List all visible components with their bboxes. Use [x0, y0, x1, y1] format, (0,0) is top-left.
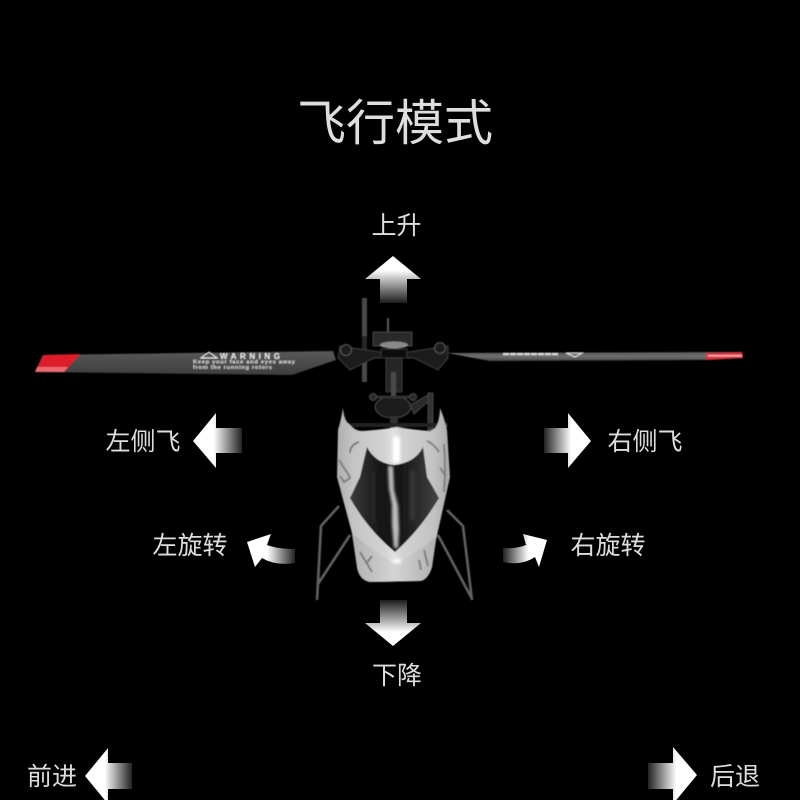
arrow: up [365, 256, 421, 303]
antenna [387, 318, 389, 334]
swashplate [375, 396, 411, 418]
canopy [337, 408, 450, 582]
hub arms [338, 346, 448, 370]
canopy decals [339, 441, 446, 572]
right rotor blade [447, 352, 743, 361]
left rotor blade [35, 351, 336, 375]
helicopter [35, 298, 743, 600]
warning text: from the running rotors [193, 365, 272, 371]
arrow: fly left [193, 413, 242, 468]
label: rotate right: 右旋转 [570, 532, 646, 560]
warning text: Keep your face and eyes away [193, 360, 296, 366]
nose lower shell [352, 533, 436, 582]
label: rotate left: 左旋转 [152, 532, 228, 560]
arrow: fly right [544, 413, 591, 468]
nose highlight [392, 558, 402, 564]
canopy highlight [393, 436, 400, 463]
label: down: 下降 [372, 662, 422, 690]
warning text: WARNING [220, 352, 280, 361]
arrow: forward [85, 748, 132, 800]
arrow: rotate right [503, 534, 547, 567]
flybar paddle [362, 298, 367, 382]
warning text [193, 352, 296, 371]
label: fly right: 右侧飞 [607, 428, 683, 456]
label: forward: 前进 [27, 763, 77, 791]
arrow: rotate left [247, 534, 295, 567]
gear [373, 332, 412, 346]
label: backward: 后退 [710, 763, 760, 791]
motor [380, 342, 408, 348]
windscreen streaks [372, 466, 415, 548]
label: up: 上升 [371, 212, 422, 240]
arrow: backward [648, 747, 697, 800]
windscreen [350, 447, 439, 552]
arrow: down [365, 600, 421, 646]
title: 飞行模式 [297, 97, 493, 151]
landing skids [317, 506, 472, 600]
rotor head [338, 298, 448, 430]
warning text (mirrored) [503, 353, 582, 357]
label: fly left: 左侧飞 [105, 428, 181, 456]
mast [386, 358, 402, 392]
